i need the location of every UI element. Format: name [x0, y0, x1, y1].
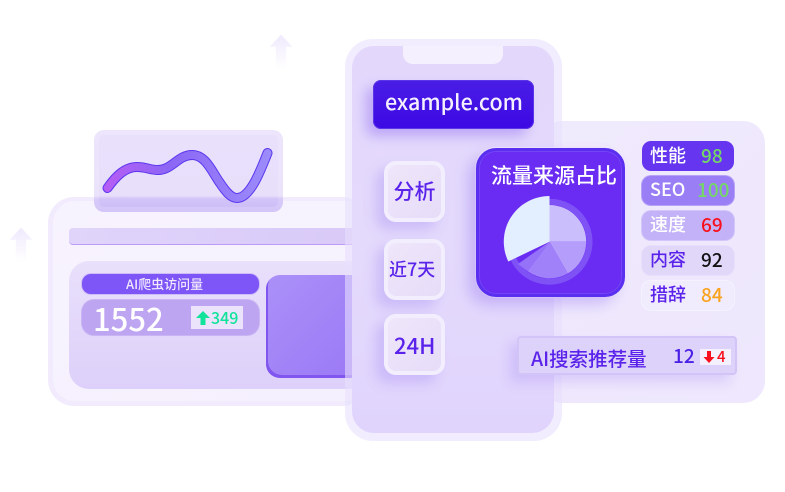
- URL text: example.com: [385, 86, 523, 117]
- panel: left crawler panel: [48, 197, 368, 406]
- value number: 1552: [93, 295, 164, 340]
- panel surface: [53, 201, 368, 401]
- panel: phone: [345, 39, 562, 441]
- button: analysis: [384, 161, 445, 222]
- value: 69: [701, 211, 723, 238]
- panel: AI search recommendations: [517, 336, 737, 375]
- value: 84: [701, 281, 723, 308]
- line chart curve: [102, 148, 272, 203]
- change badge: [191, 306, 243, 329]
- stat: SEO: [642, 176, 734, 205]
- label: 措辞: [650, 281, 686, 307]
- stat: content: [642, 246, 734, 275]
- stat: wording: [642, 281, 734, 310]
- change value: 4: [717, 346, 726, 367]
- icon: red down arrow: [704, 351, 714, 363]
- button label: 分析: [394, 176, 436, 206]
- icon: green up arrow: [196, 311, 210, 325]
- button label: 24H: [394, 329, 435, 361]
- panel: line chart card: [94, 130, 283, 212]
- value: 100: [697, 176, 730, 203]
- panel: right scores panel: [540, 121, 765, 403]
- label: 速度: [650, 211, 686, 237]
- heading pill: AI crawler visits: [82, 274, 259, 294]
- change value: 349: [211, 305, 238, 329]
- arrow: top faded up arrow: [270, 35, 292, 56]
- label: 内容: [650, 246, 686, 272]
- purple block: [266, 275, 368, 378]
- button: last 7 days: [384, 239, 445, 300]
- stat: performance: [642, 141, 734, 171]
- value: 92: [701, 246, 723, 273]
- phone notch: [403, 46, 503, 64]
- panel: traffic source pie tile: [476, 148, 625, 297]
- phone screen: [352, 46, 554, 433]
- label: SEO: [650, 176, 685, 202]
- stat: speed: [642, 211, 734, 240]
- address bar: [69, 228, 368, 245]
- value: 98: [701, 142, 723, 169]
- button: 24H: [384, 314, 445, 375]
- label: 性能: [650, 142, 686, 168]
- change badge: [700, 349, 731, 365]
- URL button: [373, 80, 534, 129]
- label: AI搜索推荐量: [531, 343, 647, 372]
- value: 12: [673, 342, 695, 369]
- heading text: AI爬虫访问量: [126, 274, 203, 293]
- arrow: left faded up arrow: [10, 228, 32, 250]
- tile title: 流量来源占比: [491, 160, 617, 190]
- pie chart: [504, 196, 592, 285]
- value pill: [82, 300, 259, 335]
- button label: 近7天: [389, 256, 435, 282]
- inner data card: [69, 261, 368, 389]
